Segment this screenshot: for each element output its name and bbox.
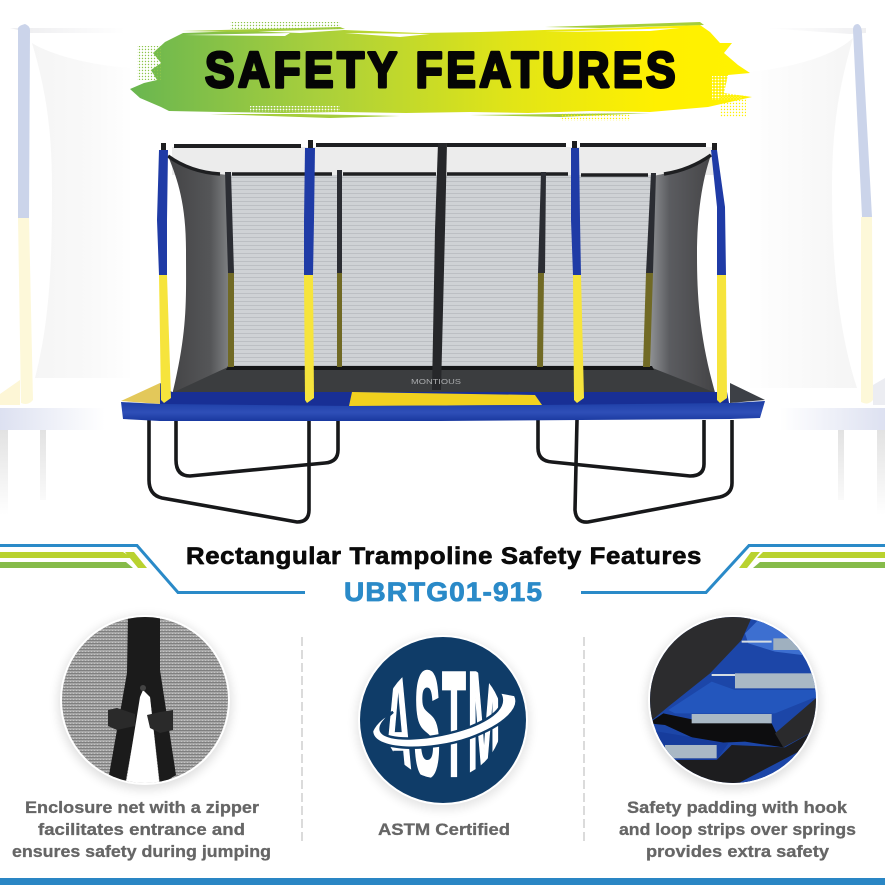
icon: astm logo: ASTM: [384, 639, 502, 808]
padding caption: [619, 798, 856, 861]
jumping mat: [172, 367, 716, 393]
padding photo circle: [635, 610, 822, 790]
pad front face: [121, 401, 765, 421]
dashed column dividers: [302, 637, 584, 843]
enclosure caption: facilitates entrance and: [38, 820, 245, 839]
outer poles: [157, 140, 727, 403]
paint brush banner with title: [130, 22, 752, 121]
section heading with decorative lines: [0, 543, 885, 607]
bottom bar: [0, 878, 885, 885]
feature: safety padding: [619, 610, 856, 861]
enclosure caption: Enclosure net with a zipper: [25, 798, 259, 817]
right grey corner: [730, 383, 765, 403]
legs: [149, 420, 732, 522]
center zipper: [432, 143, 447, 390]
zipper photo circle: [58, 612, 232, 790]
back net: [226, 175, 652, 368]
background ghost trampoline: right: [750, 24, 885, 515]
model number: UBRTG01-915: [344, 577, 543, 607]
enclosure caption: [12, 798, 271, 861]
net rails: [168, 145, 711, 175]
brush stroke: [130, 25, 752, 113]
astm caption: ASTM Certified: [378, 820, 510, 839]
feature: astm certification: [356, 635, 530, 839]
left yellow corner: [121, 383, 160, 404]
background ghost trampoline: left: [0, 24, 130, 515]
feature: enclosure net zipper: [12, 612, 271, 861]
right side net: [650, 155, 716, 396]
yellow door pad: [349, 392, 542, 406]
title: safety features: SAFETY FEATURES: [205, 42, 679, 98]
frame pad top strip: [160, 383, 730, 408]
trampoline photo illustration: [121, 140, 765, 522]
brand mark on mat: MONTIOUS: [411, 379, 461, 386]
brush streaks: [137, 22, 746, 121]
padding caption: and loop strips over springs: [619, 820, 856, 839]
inner poles: [225, 170, 656, 367]
left side net: [168, 156, 228, 395]
enclosure caption: ensures safety during jumping: [12, 842, 271, 861]
heading text: Rectangular Trampoline Safety Features: [186, 543, 702, 570]
padding caption: Safety padding with hook: [627, 798, 848, 817]
padding caption: provides extra safety: [646, 842, 830, 861]
net upper band: [172, 147, 714, 175]
